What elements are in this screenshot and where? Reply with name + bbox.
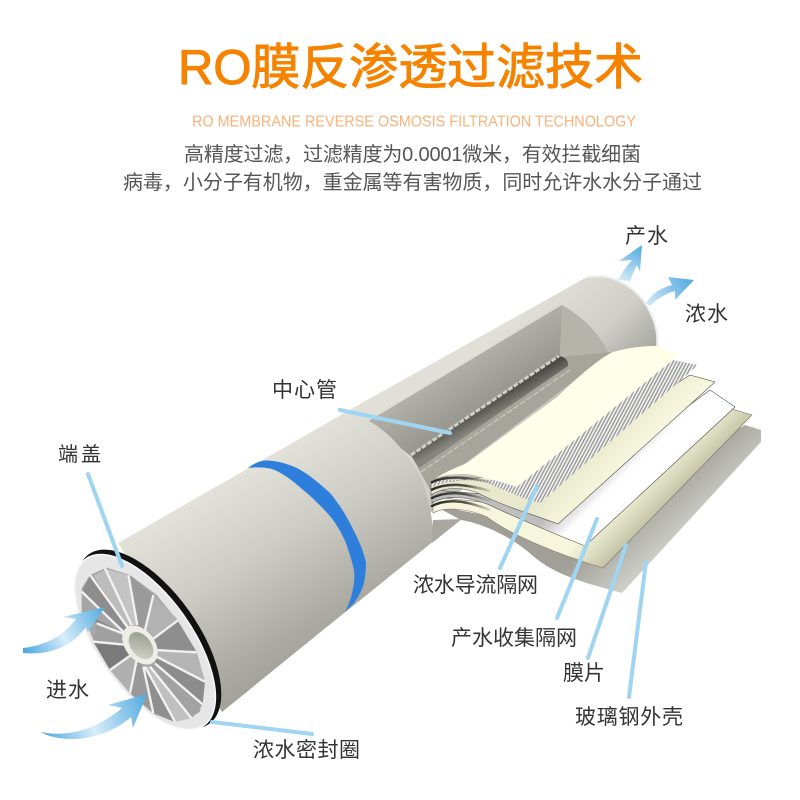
subtitle: RO MEMBRANE REVERSE OSMOSIS FILTRATION TECHNOLOGY — [192, 114, 636, 130]
cutaway end wall — [560, 305, 609, 370]
spokes — [82, 568, 205, 722]
labels — [46, 225, 728, 762]
cutaway wall striations — [367, 305, 562, 457]
label: concentrate spacer: 浓水导流隔网 — [413, 574, 538, 597]
label: concentrate seal: 浓水密封圈 — [253, 739, 360, 762]
arrow: product water — [618, 245, 642, 281]
label: fiberglass shell: 玻璃钢外壳 — [575, 706, 683, 729]
central hub — [115, 619, 165, 671]
top cream sheet — [435, 346, 680, 487]
arrow: feed water lower — [40, 694, 147, 739]
arrow: feed water upper — [23, 607, 105, 653]
end cap — [48, 526, 249, 752]
label: product collection mesh: 产水收集隔网 — [451, 627, 577, 650]
leader lines — [88, 410, 646, 734]
description text: 病毒，小分子有机物，重金属等有害物质，同时允许水水分子通过 — [123, 171, 702, 194]
front cylinder body — [118, 400, 450, 712]
arrow: concentrate — [646, 277, 694, 306]
description text — [123, 143, 702, 194]
spoked face — [82, 568, 205, 722]
label: product water: 产水 — [625, 225, 668, 248]
white rim — [48, 532, 242, 752]
central tube — [411, 356, 570, 472]
label: central tube: 中心管 — [272, 379, 337, 402]
inner recess — [82, 568, 205, 722]
second cream sheet — [431, 375, 715, 524]
blue band — [248, 460, 366, 612]
dark separators at stack edge — [431, 478, 490, 510]
white sheet: product water collection mesh — [432, 390, 735, 546]
title: RO膜反渗透过滤技术 — [178, 41, 643, 95]
cutaway floor — [412, 352, 612, 490]
wedge shading — [82, 569, 205, 722]
label: end cap: 端盖 — [58, 443, 101, 466]
hub bore — [124, 627, 158, 664]
label: membrane sheet: 膜片 — [563, 662, 605, 685]
label: concentrate: 浓水 — [685, 303, 728, 326]
membrane element illustration — [48, 276, 761, 752]
outer shell sheet — [433, 425, 761, 593]
concentrate flow spacer mesh — [432, 360, 698, 503]
black seal ring — [49, 526, 249, 752]
third sheet: membrane — [433, 407, 752, 568]
rear end cap rim — [587, 276, 657, 350]
label: feed water: 进水 — [46, 679, 89, 702]
rear cylinder — [360, 276, 657, 520]
shell strip under stack — [432, 519, 462, 543]
cutaway rear wall — [367, 305, 562, 457]
description text: 高精度过滤，过滤精度为0.0001微米，有效拦截细菌 — [184, 143, 641, 166]
